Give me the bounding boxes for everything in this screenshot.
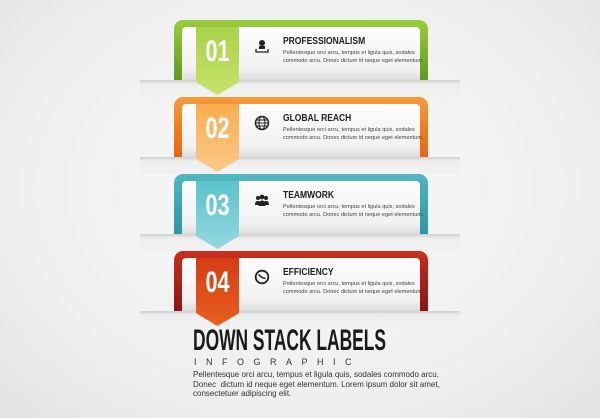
frame orange [174, 97, 428, 157]
label 02 [140, 97, 460, 174]
text: Pellentesque orci arcu, tempus et ligula quis, sodales commodo arcu. Donec dictum id neque eget elementum. [283, 127, 424, 141]
icon: professional [255, 40, 269, 53]
title: TEAMWORK [283, 190, 334, 201]
label 03 [140, 174, 460, 249]
tab 04 [196, 258, 239, 326]
description: Pellentesque orci arcu, tempus et ligula quis, sodales commodo arcu. [193, 370, 439, 379]
tab 01 [196, 27, 239, 95]
title: GLOBAL REACH [283, 113, 351, 124]
description: Donec dictum id neque eget elementum. Lorem ipsum dolor sit amet, [193, 380, 440, 388]
main title: DOWN STACK LABELS [193, 324, 386, 357]
icon: globe [254, 116, 270, 130]
icon: clock [254, 270, 270, 284]
label 04 [140, 251, 460, 326]
number 03: 03 [205, 189, 230, 222]
label 01 [140, 20, 460, 95]
tab 03 [196, 181, 239, 249]
text: Pellentesque orci arcu, tempus et ligula quis, sodales commodo arcu. Donec dictum id neque eget elementum. [283, 281, 424, 295]
tab 02 [196, 104, 239, 172]
description [193, 370, 440, 398]
text: Pellentesque orci arcu, tempus et ligula quis, sodales commodo arcu. Donec dictum id neque eget elementum. [283, 50, 424, 64]
icon: team [255, 194, 269, 206]
text: Pellentesque orci arcu, tempus et ligula quis, sodales commodo arcu. Donec dictum id neque eget elementum. [283, 204, 424, 218]
description: consectetuer adipiscing elit. [193, 389, 291, 398]
number 01: 01 [205, 35, 230, 68]
number 04: 04 [205, 266, 230, 299]
title: EFFICIENCY [283, 267, 334, 278]
frame teal [174, 174, 428, 234]
subtitle: INFOGRAPHIC [194, 357, 361, 367]
frame red [174, 251, 428, 311]
frame green [174, 20, 428, 80]
title: PROFESSIONALISM [283, 36, 365, 47]
number 02: 02 [205, 112, 230, 145]
